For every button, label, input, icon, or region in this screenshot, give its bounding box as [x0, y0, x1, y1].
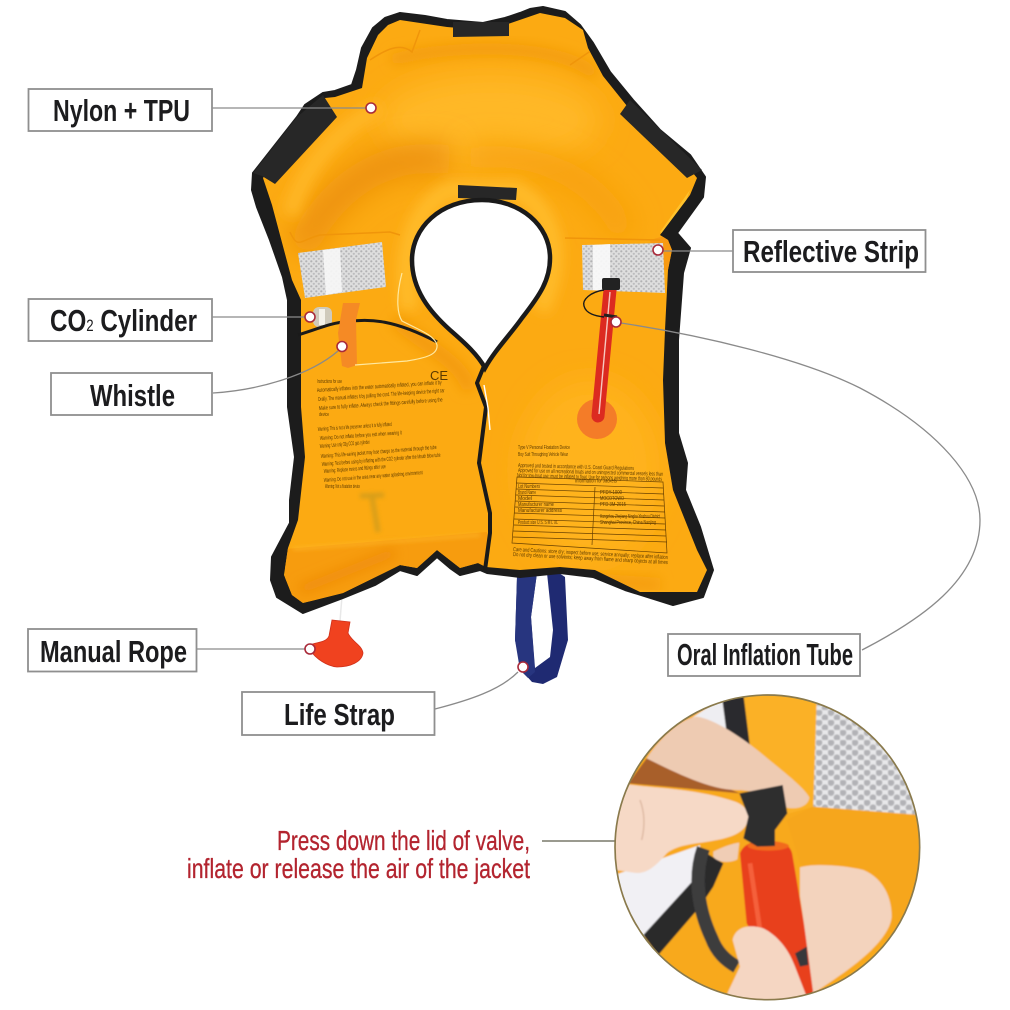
specification table on right panel [512, 445, 668, 566]
instruction text on pocket: device [319, 412, 329, 418]
specification table on right panel: Do not dry clean or use solvents; keep away from flame and sharp objects at all times [513, 552, 668, 566]
black tether [698, 848, 737, 967]
reflective patch [813, 703, 925, 815]
instruction text on pocket: Warning: Do not use in the area near any water splashing environment [324, 470, 423, 484]
label: Oral Inflation Tube: Oral Inflation Tube [677, 637, 853, 672]
label: Reflective Strip [733, 230, 926, 272]
specification table on right panel: Approved for use on all recreational boats and on uninspected commercial vessels less than [518, 468, 663, 478]
whistle [338, 303, 360, 368]
shoulder seams [290, 30, 660, 242]
lower chamber below pocket [285, 532, 487, 606]
caption leader line [542, 840, 615, 842]
label: Nylon + TPU [28, 89, 212, 131]
lower right fingers [800, 865, 892, 993]
red caption: inflate or release the air of the jacket [187, 853, 530, 884]
red valve cylinder [740, 841, 815, 998]
leader line: CO2 Cylinder [212, 312, 315, 322]
instruction text on pocket: Warning: Replace inners and fittings after use [324, 464, 386, 475]
label: CO2 Cylinder [28, 299, 212, 341]
velcro patches [253, 22, 702, 200]
instruction text on pocket: Orally. The manual inflates it by pulling the cord. The life-keeping device the right car [318, 388, 445, 403]
specification table on right panel: Approved and tested in accordance with U.S. Coast Guard Regulations [518, 463, 634, 472]
specification table on right panel: Care and Cautions: store dry; inspect before use; service annually; replace after inflation [513, 547, 668, 561]
label: Reflective Strip: Reflective Strip [743, 234, 919, 269]
leader line: Life Strap [435, 662, 528, 709]
left reflective strip [298, 242, 386, 298]
instruction text on pocket: Warning: Not a floatation device [325, 484, 360, 490]
label: Manual Rope: Manual Rope [40, 634, 187, 669]
instruction text on pocket: Make sure to fully inflate. Always check the fittings carefully before using the [319, 397, 443, 412]
life strap loop [515, 567, 568, 684]
neck opening [412, 200, 550, 368]
instruction text on pocket: Warning: Use only 33g CO2 gas cylinder [320, 440, 370, 450]
bright fold near right shoulder [660, 190, 690, 233]
leader line: Reflective Strip [653, 245, 733, 255]
specification table on right panel: Manufacturer name [518, 502, 554, 508]
lower thumb [725, 926, 806, 1003]
pocket opening line [298, 320, 437, 342]
specification table on right panel: Product size U.S. S M L XL [518, 520, 558, 526]
specification table on right panel: Lot Numbers [518, 484, 540, 490]
instruction text on pocket: CE [430, 368, 448, 383]
valve shadow inside pocket [360, 495, 384, 532]
leader line: Whistle [213, 342, 347, 393]
label: Manual Rope [28, 629, 196, 672]
label: Nylon + TPU: Nylon + TPU [53, 93, 190, 128]
manual rope cord [340, 547, 346, 621]
specification table on right panel: Manufacturer address [518, 508, 562, 514]
specification table on right panel: Model [518, 496, 532, 502]
right reflective strip [582, 243, 665, 293]
instruction text on pocket: Warning: Test before using by inflating with the CO2 cylinder after the Mouth Blow tube [322, 453, 441, 468]
specification table on right panel: Hangzhou Zhejiang Ningbo Yinzhou District [600, 514, 660, 520]
specification table on right panel: Not for tow-boat use; must be inflated to float. Use for persons weighing more than 80 pounds [517, 473, 662, 483]
centre seam [477, 366, 490, 570]
instruction text on pocket: Warning: Do not inflate before you exit when wearing it [320, 430, 402, 442]
label: Oral Inflation Tube [668, 634, 860, 676]
label: Life Strap [242, 692, 434, 735]
brown shadow behind fingers [628, 758, 740, 793]
circular photo inset: pressing valve lid [610, 690, 927, 1007]
label: Life Strap: Life Strap [284, 697, 395, 732]
specification table on right panel: Brand Name [518, 490, 536, 496]
leader line: Nylon + TPU [212, 103, 376, 113]
instruction text on pocket: Instructions for use [317, 379, 342, 385]
photo circle outline [615, 695, 920, 1000]
red caption: Press down the lid of valve, [277, 825, 530, 856]
label: Whistle [51, 373, 212, 415]
specification table on right panel: Information for Jackets [575, 478, 617, 484]
thumb [615, 784, 748, 873]
label: Whistle: Whistle [90, 378, 175, 413]
specification table on right panel: MOCOTOWO [600, 496, 624, 502]
instruction text on pocket: Warning: This life-saving jacket may lose charge as the material through the tube [321, 445, 437, 460]
specification table on right panel: Shanghai Province, China Nanjing [600, 520, 656, 526]
label: CO2 Cylinder: CO2 Cylinder [50, 303, 197, 338]
specification table on right panel: PFDY-1000 [600, 490, 622, 496]
whistle cord [355, 273, 437, 365]
black valve cap [739, 785, 787, 847]
specification table on right panel: PFD 3M-2015 [600, 502, 626, 508]
index finger [647, 717, 809, 808]
jacket black edge binding [252, 7, 713, 613]
oral inflation tube [577, 278, 620, 439]
CO2 cylinder [313, 307, 332, 327]
red caption [187, 825, 530, 884]
black edge band [643, 853, 723, 955]
specification table on right panel: Type V Personal Floatation Device [518, 445, 570, 451]
inflated orange bladder [250, 5, 720, 615]
instruction text on pocket: Warning: This is not a life preserver unless it is fully inflated [318, 422, 392, 433]
manual rope tag [310, 620, 363, 667]
instruction text on pocket: Automatically inflates into the water automatically inflated, you can inflate it by [317, 380, 442, 394]
specification table on right panel: Boy Suit Throughing Vehicle Wear [518, 452, 568, 458]
life jacket illustration [250, 5, 720, 684]
leader line: Manual Rope [196, 644, 315, 654]
instruction text on pocket [317, 368, 448, 490]
jacket background areas [692, 702, 728, 730]
leader line: Oral Inflation Tube [611, 317, 980, 650]
